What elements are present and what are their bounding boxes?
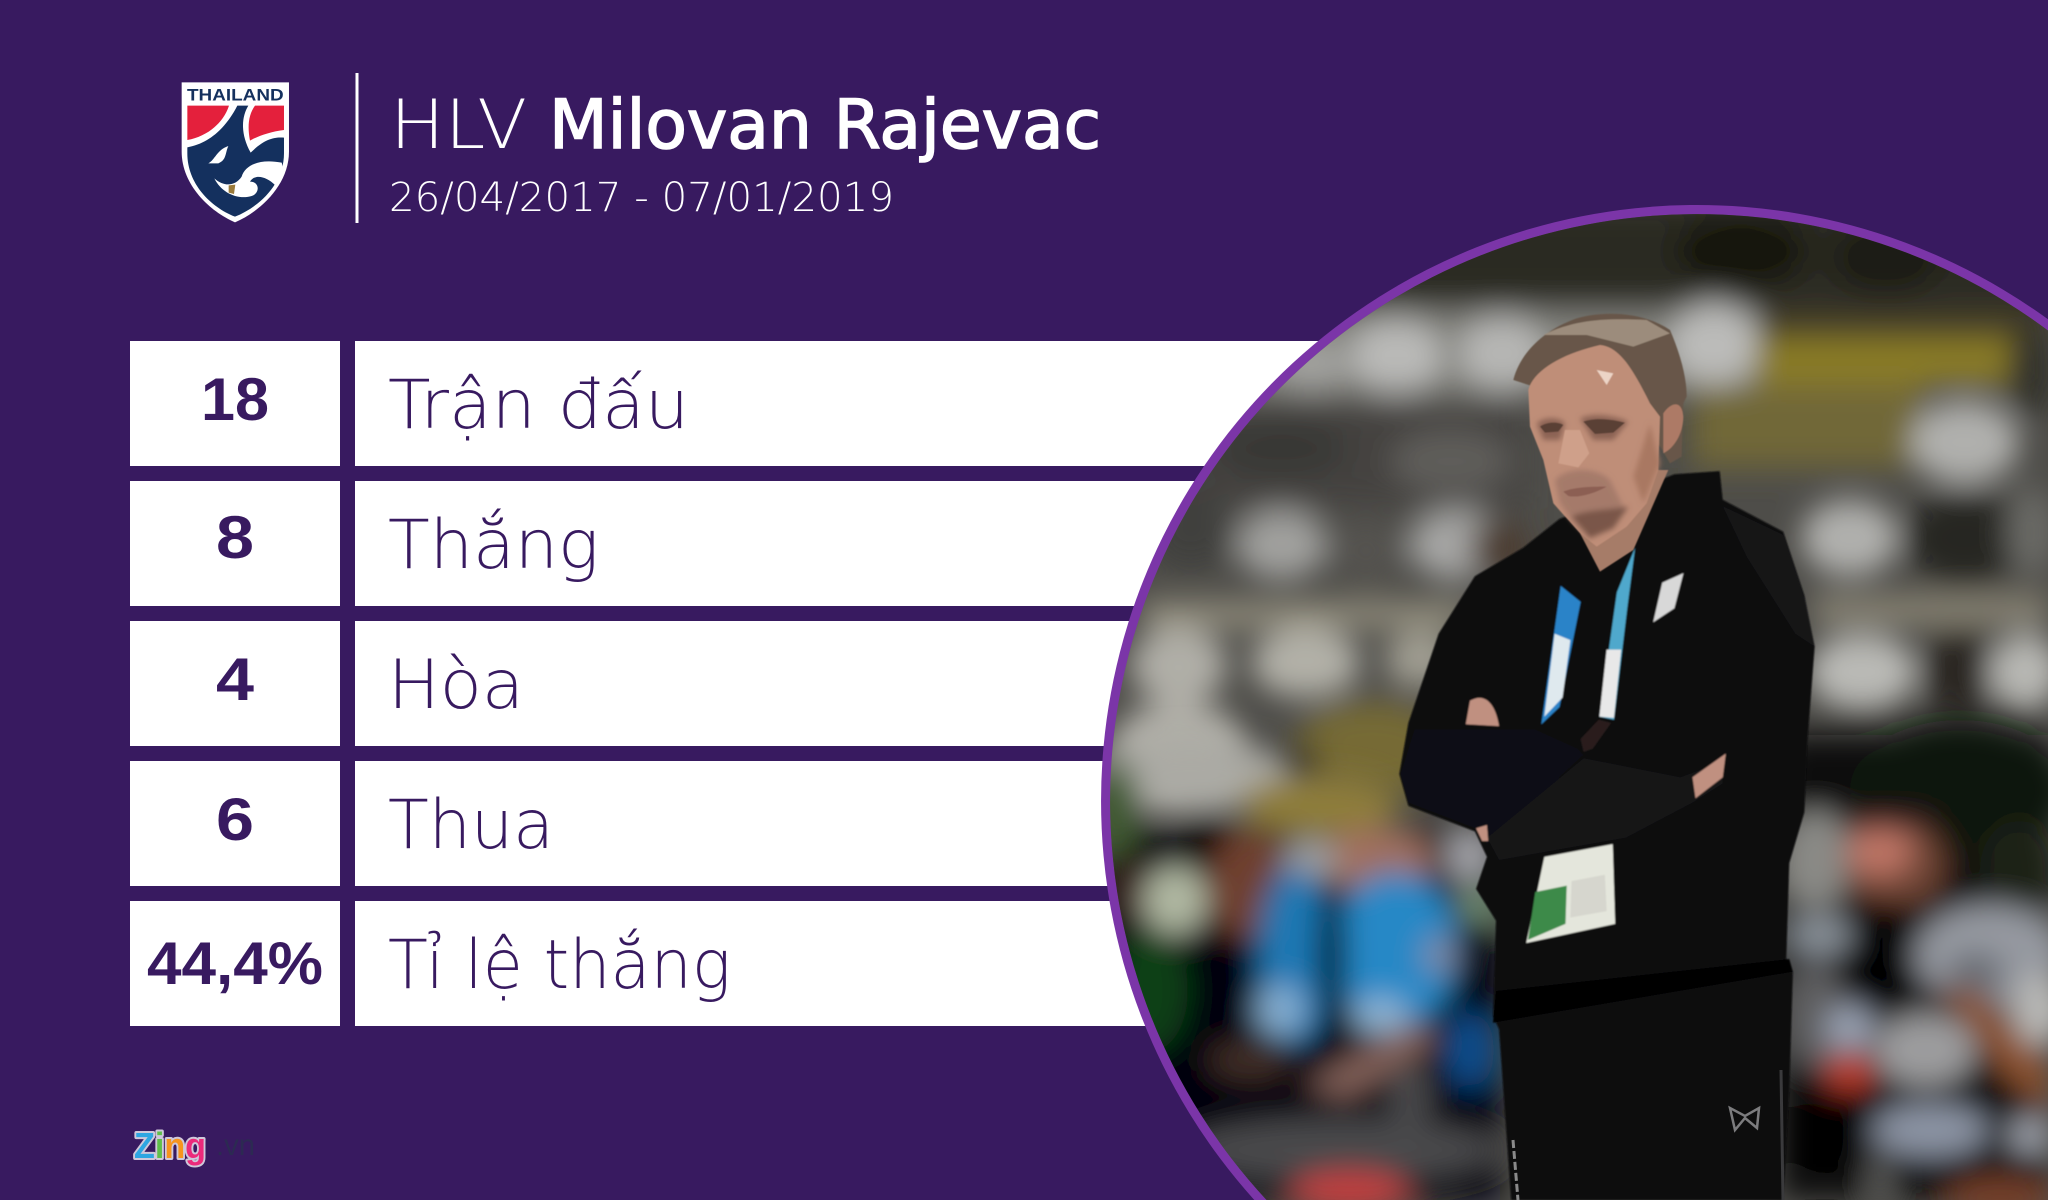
logo: Thailand football shield: THAILAND [187, 86, 284, 105]
photo: coach in circular frame [1090, 200, 2048, 1200]
row: matches: Trận đấu [388, 366, 689, 445]
hands [1466, 698, 1499, 726]
title: HLV [390, 86, 527, 165]
row: losses: Thua [388, 786, 554, 865]
row: wins: 8 [216, 504, 254, 571]
row: draws: 4 [216, 646, 255, 713]
row: win rate [130, 901, 1455, 1026]
row: wins [130, 481, 1455, 606]
blurred photographer, lower right [1779, 720, 2048, 1200]
row: losses: 6 [216, 786, 254, 853]
title: Milovan Rajevac [549, 86, 1101, 165]
row: draws: Hòa [388, 646, 524, 725]
date range: 26/04/2017 - 07/01/2019 [389, 175, 894, 221]
row: matches: 18 [201, 366, 269, 433]
row: losses [130, 761, 1455, 886]
logo: Zing.vn: .vn [216, 1129, 255, 1162]
jacket emblem [1653, 573, 1683, 622]
blurred crowd, lower left [1090, 740, 1504, 1200]
logo: Thailand football shield [182, 82, 289, 222]
stats table [130, 341, 1455, 1026]
accreditation badge [1526, 844, 1615, 943]
coach body [1399, 471, 1815, 1200]
row: win rate: Tỉ lệ thắng [388, 926, 731, 1005]
lanyard [1541, 586, 1581, 724]
row: win rate: 44,4% [147, 930, 323, 997]
trouser logo and trims [1513, 1070, 1783, 1200]
row: wins: Thắng [388, 506, 599, 585]
header divider [356, 73, 358, 223]
coach head [1513, 314, 1687, 572]
row: matches [130, 341, 1455, 466]
logo: Zing.vn [134, 1125, 255, 1166]
logo: Zing.vn: Zing [134, 1125, 206, 1166]
row: draws [130, 621, 1455, 746]
blurred stadium background, upper part [1112, 200, 2048, 796]
